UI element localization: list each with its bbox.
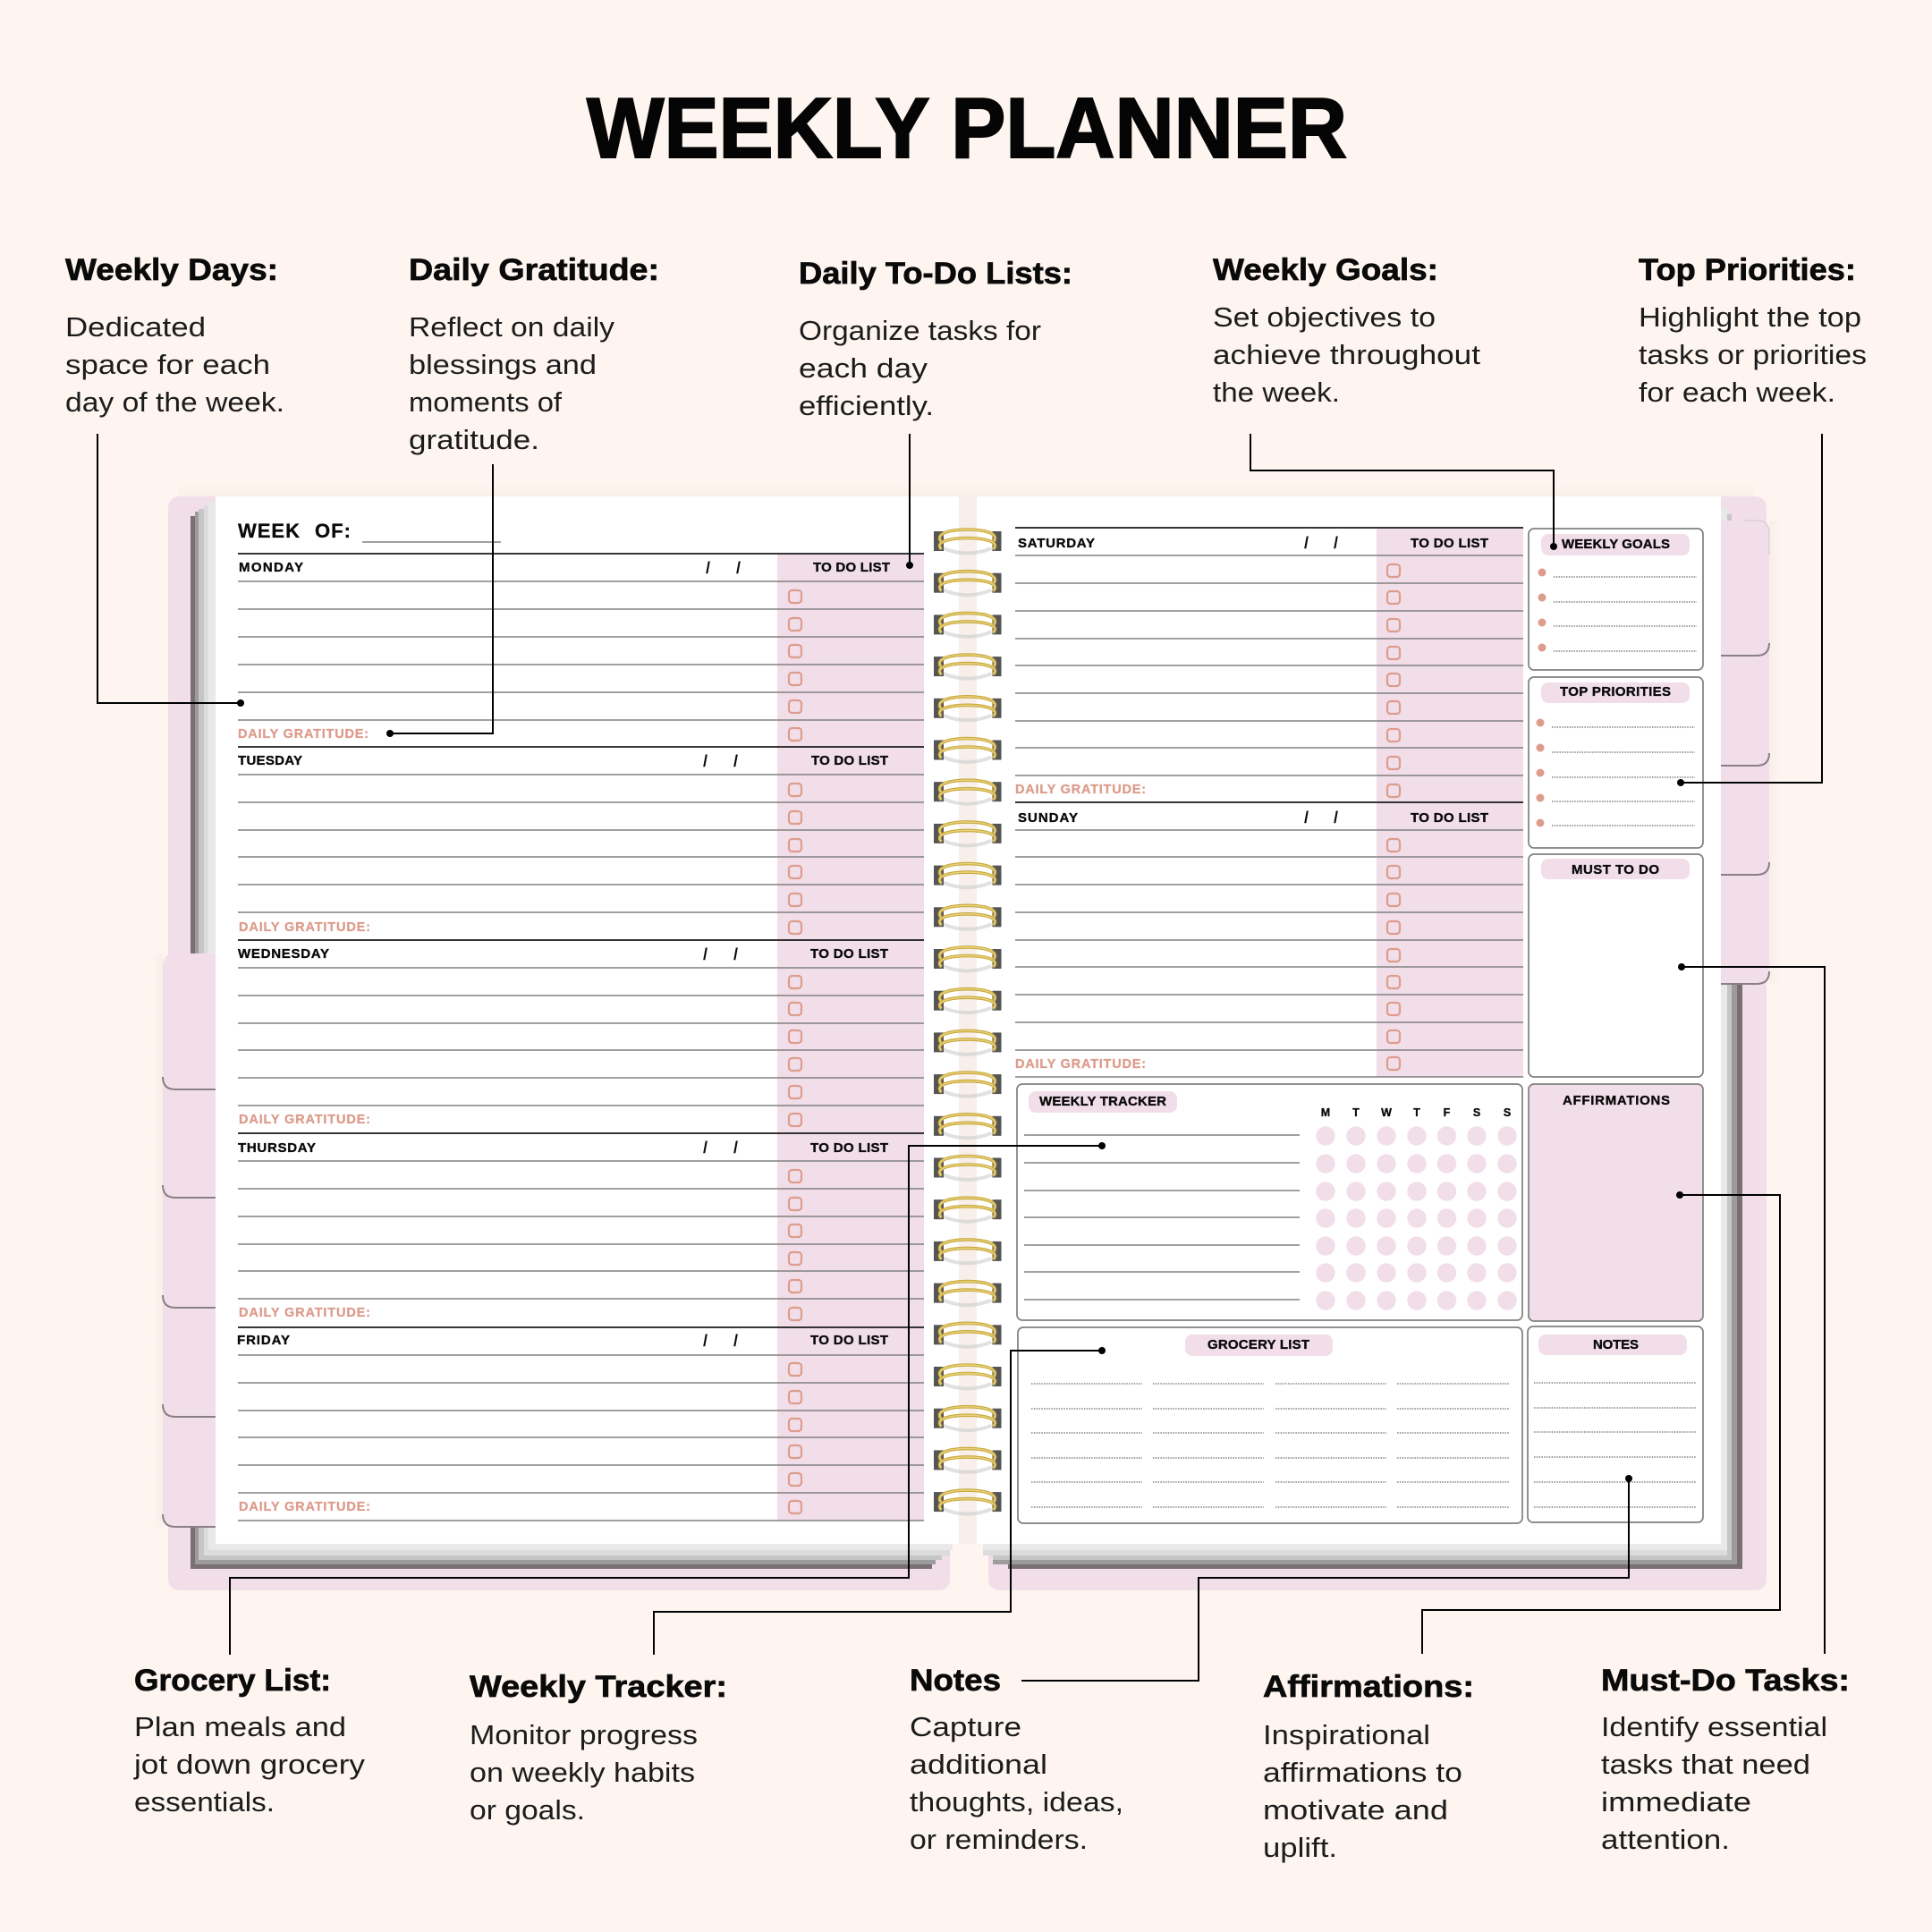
connector: notes [1021, 1475, 1632, 1681]
callout: grocery list: jot down grocery [133, 1749, 366, 1780]
day: sunday: SUNDAY [1018, 810, 1078, 826]
day: monday [238, 554, 924, 741]
connector: daily gratitude [386, 464, 493, 737]
callout: affirmations [1263, 1670, 1474, 1863]
callout: daily gratitude: Reflect on daily [409, 311, 615, 343]
callout: notes: Notes [910, 1664, 1001, 1698]
callout: weekly goals: the week. [1213, 377, 1340, 408]
callout: top priorities: Top Priorities: [1639, 253, 1856, 287]
connector: affirmations [1422, 1191, 1780, 1654]
day: tuesday: DAILY GRATITUDE: [239, 920, 370, 935]
callout: daily gratitude: blessings and [409, 349, 597, 380]
callout: notes: or reminders. [910, 1824, 1088, 1855]
day: tuesday: / [733, 752, 738, 770]
panel: grocery list: GROCERY LIST [1208, 1337, 1309, 1352]
day: tuesday: TUESDAY [238, 753, 302, 768]
callout: must-do tasks: tasks that need [1601, 1749, 1810, 1780]
connector: weekly tracker [654, 1347, 1106, 1655]
left side tabs [163, 953, 216, 1527]
day: sunday [1015, 802, 1523, 1077]
callout: top priorities: Highlight the top [1639, 301, 1861, 333]
callout: must-do tasks [1601, 1664, 1850, 1855]
day: sunday: TO DO LIST [1411, 810, 1488, 826]
day: saturday: / [1334, 534, 1338, 552]
callout: weekly days: Dedicated [65, 311, 206, 343]
panel: weekly tracker: WEEKLY TRACKER [1039, 1094, 1166, 1109]
callout: affirmations: motivate and [1263, 1794, 1448, 1826]
right side tabs [1721, 521, 1769, 984]
day: saturday: / [1304, 534, 1309, 552]
callout: must-do tasks: Must-Do Tasks: [1601, 1664, 1850, 1698]
day: wednesday: DAILY GRATITUDE: [239, 1113, 370, 1127]
connector: grocery list [230, 1142, 1106, 1655]
callout: affirmations: Inspirational [1263, 1719, 1430, 1750]
callout: weekly goals: achieve throughout [1213, 339, 1480, 370]
panel: top priorities [1529, 677, 1703, 848]
callout: weekly tracker: Weekly Tracker: [470, 1670, 727, 1704]
callout: weekly tracker: or goals. [470, 1794, 585, 1826]
panel: weekly tracker: T [1352, 1106, 1360, 1119]
callout: daily to-do lists: Organize tasks for [799, 315, 1041, 346]
day: wednesday: / [733, 945, 738, 963]
callout: affirmations: Affirmations: [1263, 1670, 1474, 1704]
panel: grocery list [1018, 1327, 1522, 1523]
callout: grocery list: Plan meals and [134, 1711, 346, 1742]
day: sunday: / [1304, 809, 1309, 826]
day: friday: TO DO LIST [810, 1333, 888, 1348]
callout: daily gratitude [409, 253, 659, 455]
day: monday: TO DO LIST [813, 560, 890, 575]
day: sunday: / [1334, 809, 1338, 826]
callout: weekly days: day of the week. [65, 386, 284, 418]
day: wednesday: TO DO LIST [810, 946, 888, 962]
callout: weekly days: Weekly Days: [65, 253, 278, 287]
callout: grocery list: Grocery List: [134, 1664, 331, 1698]
day: friday [237, 1327, 924, 1521]
panel: top priorities: TOP PRIORITIES [1560, 684, 1671, 699]
day: wednesday: WEDNESDAY [238, 946, 329, 962]
panel: weekly tracker: W [1381, 1106, 1392, 1119]
planner illustration [152, 483, 1780, 1590]
spine strip [959, 496, 977, 1544]
day: saturday: DAILY GRATITUDE: [1015, 783, 1146, 797]
left page header: week of [238, 520, 501, 542]
callout: notes: thoughts, ideas, [910, 1786, 1123, 1818]
panel: weekly tracker: T [1413, 1106, 1420, 1119]
callout: notes [910, 1664, 1123, 1855]
left cover [168, 496, 950, 1590]
connector: weekly days [97, 434, 244, 707]
callout: weekly goals: Weekly Goals: [1213, 253, 1438, 287]
panel: affirmations [1529, 1084, 1703, 1321]
panel: weekly tracker: F [1444, 1106, 1451, 1119]
day: friday: / [733, 1332, 738, 1350]
callout: weekly tracker: Monitor progress [470, 1719, 698, 1750]
left page [216, 496, 959, 1544]
callout: must-do tasks: immediate [1601, 1786, 1751, 1818]
day: thursday: / [733, 1139, 738, 1157]
panel: weekly goals [1529, 529, 1703, 670]
connector: top priorities [1677, 434, 1822, 786]
day: thursday: / [703, 1139, 708, 1157]
left page stack [191, 502, 953, 1569]
right cover [988, 496, 1767, 1590]
panel: weekly goals: WEEKLY GOALS [1562, 537, 1670, 552]
callout: weekly days [65, 253, 284, 418]
callout: affirmations: uplift. [1263, 1832, 1337, 1863]
callout: must-do tasks: attention. [1601, 1824, 1730, 1855]
day: tuesday [238, 747, 924, 935]
callout: grocery list [133, 1664, 366, 1818]
day: thursday: DAILY GRATITUDE: [239, 1306, 370, 1320]
connector: must-do tasks [1678, 963, 1825, 1654]
to-do column: left page [777, 554, 924, 1521]
left page header: week of: WEEK [238, 520, 300, 542]
callout: weekly goals: Set objectives to [1213, 301, 1436, 333]
callout: daily to-do lists: efficiently. [799, 390, 934, 421]
callout: top priorities: for each week. [1639, 377, 1835, 408]
day: saturday: TO DO LIST [1411, 536, 1488, 551]
panel: affirmations: AFFIRMATIONS [1563, 1093, 1670, 1108]
connector: daily to-do lists [906, 434, 913, 569]
right page stack [983, 508, 1742, 1569]
callout: notes: Capture [910, 1711, 1021, 1742]
title: WEEKLY PLANNER [587, 80, 1347, 176]
day: saturday: SATURDAY [1018, 536, 1095, 551]
day: thursday [238, 1133, 924, 1320]
day: monday: DAILY GRATITUDE: [238, 727, 369, 741]
connector: weekly goals [1250, 434, 1557, 550]
panel: weekly tracker: S [1473, 1106, 1480, 1119]
callout: affirmations: affirmations to [1263, 1757, 1462, 1788]
callout: weekly days: space for each [65, 349, 270, 380]
callout: top priorities [1639, 253, 1867, 408]
day: thursday: THURSDAY [238, 1140, 316, 1156]
callout: weekly goals [1213, 253, 1480, 408]
callout: daily to-do lists [799, 257, 1072, 421]
callout: daily gratitude: Daily Gratitude: [409, 253, 659, 287]
day: wednesday [238, 940, 924, 1127]
day: wednesday: / [703, 945, 708, 963]
day: thursday: TO DO LIST [810, 1140, 888, 1156]
day: friday: / [703, 1332, 708, 1350]
panel: weekly tracker: M [1321, 1106, 1330, 1119]
callout: grocery list: essentials. [134, 1786, 275, 1818]
panel: must to do: MUST TO DO [1572, 862, 1659, 877]
day: tuesday: TO DO LIST [811, 753, 888, 768]
left page header: week of: OF: [315, 520, 351, 542]
day: saturday [1015, 528, 1523, 797]
panel: weekly tracker: S [1504, 1106, 1511, 1119]
right page [977, 496, 1721, 1544]
callout: daily to-do lists: each day [799, 352, 928, 384]
callout: weekly tracker [470, 1670, 727, 1826]
day: friday: FRIDAY [237, 1333, 290, 1348]
day: friday: DAILY GRATITUDE: [239, 1500, 370, 1514]
callout: daily to-do lists: Daily To-Do Lists: [799, 257, 1072, 291]
day: monday: / [736, 559, 741, 577]
day: sunday: DAILY GRATITUDE: [1015, 1057, 1146, 1072]
day: monday: / [706, 559, 710, 577]
panel: weekly tracker [1017, 1084, 1522, 1320]
callout: daily gratitude: moments of [409, 386, 562, 418]
callout: must-do tasks: Identify essential [1601, 1711, 1827, 1742]
panel: must to do [1529, 854, 1703, 1077]
day: monday: MONDAY [239, 560, 303, 575]
callout: notes: additional [910, 1749, 1047, 1780]
panel: notes [1528, 1326, 1703, 1522]
callout: weekly tracker: on weekly habits [470, 1757, 695, 1788]
callout: top priorities: tasks or priorities [1639, 339, 1867, 370]
panel: notes: NOTES [1593, 1337, 1639, 1352]
day: tuesday: / [703, 752, 708, 770]
to-do column: right page [1377, 528, 1523, 1077]
callout: daily gratitude: gratitude. [409, 424, 539, 455]
spiral binding rings [934, 530, 1002, 1514]
